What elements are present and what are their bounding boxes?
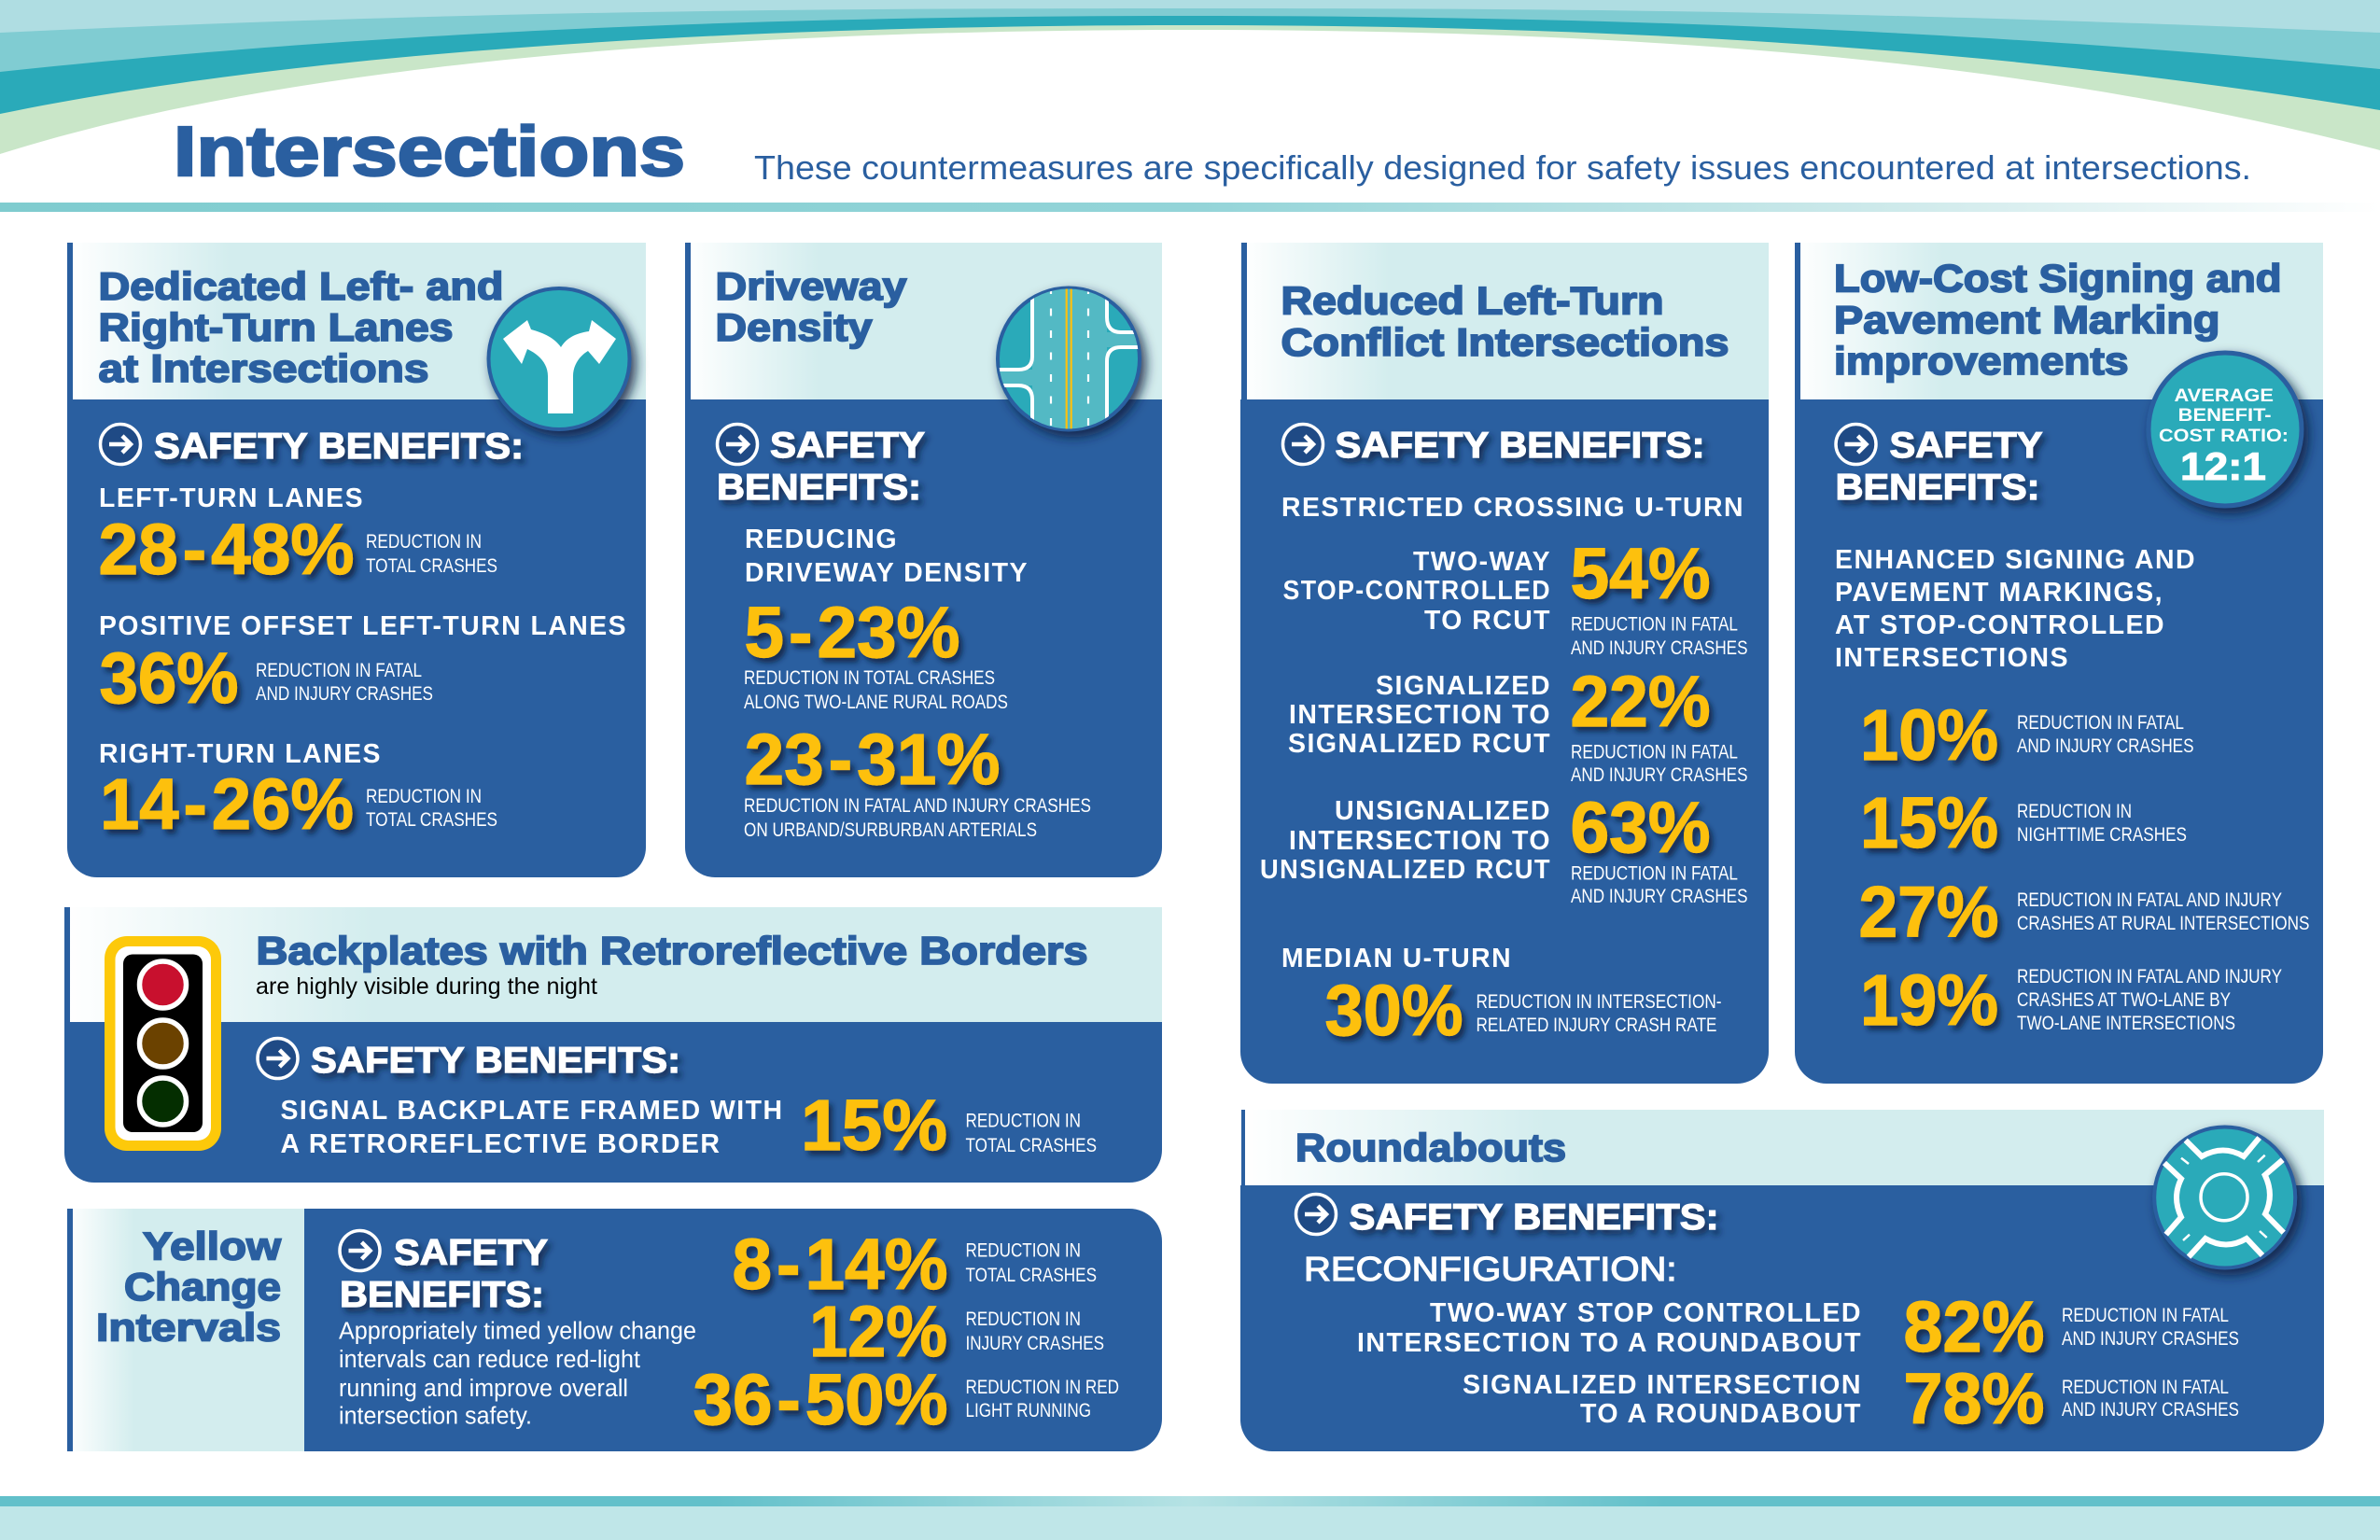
panel: dedicated left- and right-turn lanes	[67, 243, 646, 877]
subtitle: These countermeasures are specifically designed for safety issues encountered at intersections.	[754, 148, 2251, 187]
text: description	[339, 1318, 696, 1430]
stat: 15%: 15%	[1860, 783, 1998, 863]
stat: 19%: REDUCTION IN FATAL AND INJURY	[2017, 965, 2282, 987]
stat: positive offset left-turn lanes: POSITIVE OFFSET LEFT-TURN LANES	[99, 611, 627, 641]
stat: left-turn lanes: REDUCTION IN	[366, 530, 482, 553]
badge: average benefit-cost ratio: BENEFIT-	[2178, 405, 2272, 426]
panel: low-cost signing and pavement marking improvements	[1795, 243, 2323, 1084]
stat: 63%: AND INJURY CRASHES	[1571, 885, 1747, 907]
subheading: reducing driveway density: DRIVEWAY DENSITY	[745, 558, 1029, 588]
stat: right-turn lanes: TOTAL CRASHES	[366, 808, 497, 831]
stat: 5-23%: 5-23%	[745, 593, 959, 673]
stat: 78%: AND INJURY CRASHES	[2062, 1398, 2239, 1421]
stat: 63%: REDUCTION IN FATAL	[1571, 862, 1738, 885]
stat: 23-31%: ON URBAND/SURBURBAN ARTERIALS	[744, 819, 1037, 841]
safety benefits heading	[1835, 424, 2042, 508]
icon: roundabout	[2154, 1127, 2295, 1267]
icon: traffic light	[105, 936, 221, 1151]
stat: 82%: TWO-WAY STOP CONTROLLED	[1430, 1298, 1862, 1328]
stat: 63%: UNSIGNALIZED	[1335, 796, 1551, 826]
stat: median u-turn 30%: 30%	[1325, 971, 1463, 1051]
subheading: are highly visible during the night	[256, 973, 597, 1000]
stat: 19%: 19%	[1860, 960, 1998, 1041]
safety benefits heading: SAFETY BENEFITS:	[311, 1041, 680, 1081]
stat: median u-turn 30%: REDUCTION IN INTERSECTION-	[1477, 990, 1721, 1013]
stat: 22%: SIGNALIZED RCUT	[1288, 729, 1551, 759]
stat: 15%	[1860, 783, 2187, 863]
stat: 78%: SIGNALIZED INTERSECTION	[1463, 1370, 1862, 1400]
badge: average benefit-cost ratio: 12:1	[2180, 444, 2266, 488]
panel: yellow change intervals	[67, 1209, 1162, 1451]
icon: road with driveways	[995, 280, 1142, 439]
text: description: Appropriately timed yellow change	[339, 1318, 696, 1344]
stat: 22%: REDUCTION IN FATAL	[1571, 741, 1738, 763]
subheading: enhanced signing: AT STOP-CONTROLLED	[1835, 610, 2165, 640]
stat: 10%: REDUCTION IN FATAL	[2017, 711, 2184, 734]
header divider	[0, 203, 2380, 212]
stat: right-turn lanes: RIGHT-TURN LANES	[99, 739, 382, 769]
heading: Roundabouts	[1295, 1126, 1566, 1169]
stat: 63%	[1260, 788, 1747, 907]
heading: Backplates with Retroreflective Borders	[256, 929, 1088, 973]
stat: 5-23%: ALONG TWO-LANE RURAL ROADS	[744, 691, 1008, 713]
heading	[1834, 257, 2281, 383]
stat: 22%	[1288, 662, 1747, 786]
subheading: enhanced signing: ENHANCED SIGNING AND	[1835, 545, 2196, 575]
stat: right-turn lanes: REDUCTION IN	[366, 785, 482, 807]
subheading: reconfiguration: RECONFIGURATION:	[1304, 1250, 1676, 1288]
stat: 15%: 15%	[801, 1085, 947, 1166]
panel: reduced left-turn conflict intersections	[1240, 243, 1769, 1084]
subheading: enhanced signing: PAVEMENT MARKINGS,	[1835, 578, 2163, 608]
stat: 5-23%	[744, 593, 1008, 713]
stat: 22%: AND INJURY CRASHES	[1571, 763, 1747, 786]
stat: 78%: 78%	[1904, 1359, 2044, 1439]
stat: median u-turn 30%: MEDIAN U-TURN	[1281, 944, 1512, 973]
stat: 54%: STOP-CONTROLLED	[1282, 576, 1551, 606]
heading: Yellow	[143, 1225, 281, 1267]
icon: left and right turn arrows	[489, 288, 629, 429]
safety benefits heading: SAFETY BENEFITS:	[154, 427, 524, 467]
header swoosh	[0, 0, 2380, 159]
heading	[715, 264, 907, 349]
stat: 54%: TWO-WAY	[1413, 547, 1551, 577]
stat: 82%: 82%	[1904, 1287, 2044, 1367]
heading: Reduced Left-Turn	[1281, 279, 1663, 323]
safety benefits heading	[717, 424, 925, 508]
text: signal backplate: A RETROREFLECTIVE BORDER	[280, 1129, 721, 1159]
stat: positive offset left-turn lanes: 36%	[99, 638, 239, 719]
stat: right-turn lanes: 14-26%	[100, 764, 354, 845]
stat: 54%	[1282, 534, 1747, 659]
safety benefits heading: BENEFITS:	[717, 468, 921, 508]
heading: Pavement Marking	[1834, 298, 2219, 342]
badge: average benefit-cost ratio: AVERAGE	[2175, 385, 2274, 406]
stat: 15%	[801, 1085, 1097, 1166]
text: description: intersection safety.	[339, 1404, 532, 1430]
safety benefits heading: SAFETY	[1889, 426, 2042, 466]
subheading: reducing driveway density: REDUCING	[745, 525, 898, 554]
stat: 54%: 54%	[1570, 534, 1710, 614]
text: signal backplate	[280, 1096, 784, 1159]
subheading: reducing driveway density	[745, 525, 1029, 588]
stat: left-turn lanes: TOTAL CRASHES	[366, 554, 497, 577]
heading	[99, 264, 504, 390]
heading: Dedicated Left- and	[99, 264, 504, 308]
stat: 78%: TO A ROUNDABOUT	[1580, 1399, 1862, 1429]
stat: 78%: REDUCTION IN FATAL	[2062, 1376, 2229, 1398]
stat: 19%: TWO-LANE INTERSECTIONS	[2017, 1012, 2235, 1034]
heading: at Intersections	[99, 346, 429, 390]
stat: 54%: TO RCUT	[1424, 606, 1551, 636]
stat: 82%: REDUCTION IN FATAL	[2062, 1304, 2229, 1326]
subheading: enhanced signing	[1835, 545, 2196, 673]
stat: 63%: INTERSECTION TO	[1289, 826, 1551, 856]
stat: 36-50%	[693, 1360, 1119, 1440]
stat: 15%: REDUCTION IN	[2017, 800, 2132, 822]
heading: Density	[715, 305, 873, 349]
stat: 15%: REDUCTION IN	[965, 1109, 1081, 1131]
stat: right-turn lanes	[99, 739, 497, 845]
stat: 12%: INJURY CRASHES	[965, 1332, 1104, 1354]
stat: 5-23%: REDUCTION IN TOTAL CRASHES	[744, 666, 995, 689]
heading: Change	[124, 1265, 281, 1309]
panel: roundabouts	[1240, 1110, 2324, 1451]
stat: 63%: UNSIGNALIZED RCUT	[1260, 855, 1551, 885]
stat: median u-turn 30%: RELATED INJURY CRASH RATE	[1477, 1014, 1717, 1036]
stat: 82%	[1357, 1287, 2239, 1367]
stat: positive offset left-turn lanes	[99, 611, 627, 719]
stat: 8-14%	[732, 1225, 1097, 1305]
stat: 8-14%: 8-14%	[732, 1225, 948, 1305]
safety benefits heading: BENEFITS:	[1835, 468, 2040, 508]
heading	[96, 1225, 281, 1350]
heading: Driveway	[715, 264, 907, 308]
stat: 8-14%: TOTAL CRASHES	[965, 1264, 1097, 1286]
stat: 82%: AND INJURY CRASHES	[2062, 1327, 2239, 1350]
stat: 10%	[1860, 695, 2193, 776]
subheading: enhanced signing: INTERSECTIONS	[1835, 643, 2069, 673]
stat: 10%: AND INJURY CRASHES	[2017, 735, 2193, 757]
safety benefits heading: BENEFITS:	[340, 1275, 544, 1315]
stat: 36-50%: REDUCTION IN RED	[965, 1376, 1119, 1398]
panel: backplates with retroreflective borders	[64, 907, 1162, 1183]
text: description: intervals can reduce red-light	[339, 1347, 640, 1373]
stat: 12%: REDUCTION IN	[965, 1308, 1081, 1330]
safety benefits heading: SAFETY BENEFITS:	[1335, 426, 1704, 466]
stat: 54%: REDUCTION IN FATAL	[1571, 612, 1738, 635]
footer band	[0, 1496, 2380, 1540]
safety benefits heading: SAFETY BENEFITS:	[1350, 1197, 1719, 1238]
badge: average benefit-cost ratio	[2149, 353, 2302, 506]
safety benefits heading: SAFETY	[394, 1233, 548, 1273]
stat: 23-31%: REDUCTION IN FATAL AND INJURY CRASHES	[744, 794, 1091, 817]
safety benefits heading	[340, 1230, 548, 1315]
heading: Intervals	[96, 1305, 281, 1350]
heading: Low-Cost Signing and	[1834, 257, 2281, 301]
stat: 78%	[1463, 1359, 2239, 1439]
stat: 8-14%: REDUCTION IN	[965, 1239, 1081, 1262]
stat: 19%: CRASHES AT TWO-LANE BY	[2017, 988, 2231, 1011]
stat: left-turn lanes	[99, 483, 497, 590]
heading: Right-Turn Lanes	[99, 305, 454, 349]
stat: 27%: CRASHES AT RURAL INTERSECTIONS	[2017, 912, 2309, 934]
stat: 63%: 63%	[1570, 788, 1710, 868]
stat: median u-turn 30%	[1281, 944, 1721, 1051]
stat: left-turn lanes: LEFT-TURN LANES	[99, 483, 364, 513]
stat: 10%: 10%	[1860, 695, 1998, 776]
stat: 27%	[1859, 873, 2309, 953]
stat: 15%: NIGHTTIME CRASHES	[2017, 823, 2187, 846]
stat: 19%	[1860, 960, 2282, 1041]
stat: 22%: INTERSECTION TO	[1289, 700, 1551, 730]
stat: 36-50%: LIGHT RUNNING	[965, 1399, 1091, 1421]
text: signal backplate: SIGNAL BACKPLATE FRAMED WITH	[280, 1096, 784, 1126]
stat: 82%: INTERSECTION TO A ROUNDABOUT	[1357, 1328, 1862, 1358]
stat: 23-31%: 23-31%	[745, 720, 1001, 800]
stat: 12%	[809, 1292, 1104, 1372]
stat: 15%: TOTAL CRASHES	[965, 1134, 1097, 1156]
heading	[1281, 279, 1729, 364]
stat: 54%: AND INJURY CRASHES	[1571, 637, 1747, 659]
stat: left-turn lanes: 28-48%	[99, 510, 355, 590]
badge: average benefit-cost ratio: COST RATIO:	[2159, 426, 2289, 446]
stat: 23-31%	[744, 720, 1091, 841]
stat: positive offset left-turn lanes: REDUCTION IN FATAL	[256, 659, 422, 681]
stat: 22%: 22%	[1570, 662, 1710, 742]
stat: 12%: 12%	[809, 1292, 947, 1372]
stat: 22%: SIGNALIZED	[1376, 671, 1551, 701]
safety benefits heading: SAFETY	[770, 426, 925, 466]
stat: 36-50%: 36-50%	[693, 1360, 948, 1440]
stat: 27%: REDUCTION IN FATAL AND INJURY	[2017, 889, 2282, 911]
stat: 27%: 27%	[1859, 873, 1999, 953]
subheading: restricted crossing u-turn: RESTRICTED CROSSING U-TURN	[1281, 493, 1744, 523]
stat: positive offset left-turn lanes: AND INJURY CRASHES	[256, 682, 433, 705]
title: Intersections	[174, 112, 685, 190]
panel: driveway density	[685, 243, 1162, 877]
heading: Conflict Intersections	[1281, 320, 1729, 364]
heading: improvements	[1834, 339, 2128, 383]
text: description: running and improve overall	[339, 1376, 628, 1402]
